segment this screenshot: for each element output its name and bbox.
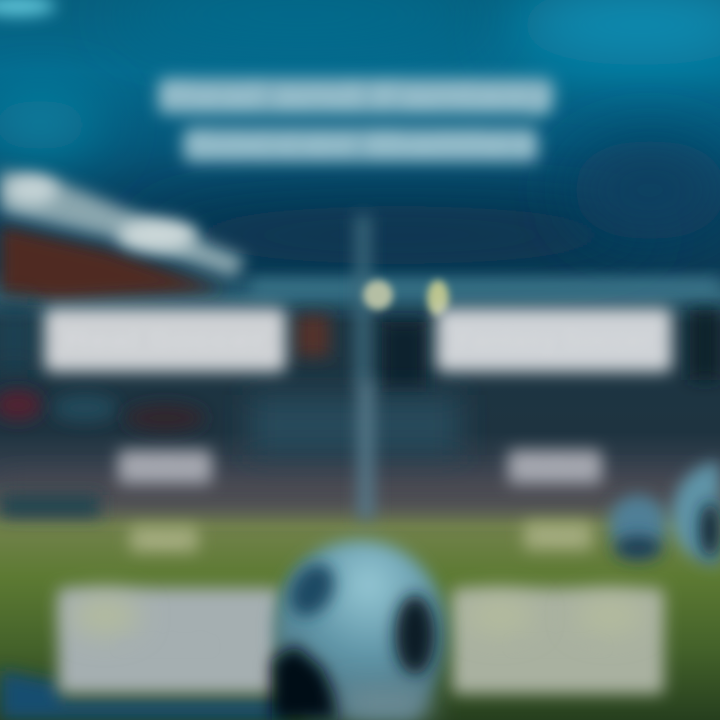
label: left sub-heading xyxy=(118,450,212,484)
panel: lower left text xyxy=(58,588,280,694)
sky clouds xyxy=(0,0,720,294)
label: left pitch tag: Pitch xyxy=(149,534,179,548)
panel: lower left text: Match details xyxy=(117,637,213,654)
panel: upper right heading: Fantasy Soccer xyxy=(456,327,652,354)
panel: upper left heading: Real Soccer xyxy=(65,327,265,354)
label: right sub-heading: Stadium xyxy=(525,460,585,477)
label: right pitch tag xyxy=(524,522,592,550)
stadium stands and crowd xyxy=(0,310,720,517)
title: Real and Fantasy xyxy=(160,75,556,117)
title: Soccer Battles xyxy=(184,124,540,166)
icon: soccer ball, foreground xyxy=(272,540,446,720)
bottom-left blue shadow xyxy=(0,670,290,720)
title xyxy=(158,75,556,166)
background soccer balls, right xyxy=(609,462,720,565)
panel: upper left heading xyxy=(44,308,286,372)
panel: lower right text: Match details xyxy=(510,637,606,654)
label: right pitch tag: Pitch xyxy=(544,530,574,544)
panel: lower right text xyxy=(452,588,664,694)
stadium roof, left xyxy=(0,170,245,370)
label: left pitch tag xyxy=(130,526,198,552)
floodlights xyxy=(363,280,449,316)
label: right sub-heading xyxy=(508,450,602,484)
goal post / central pole xyxy=(356,215,374,520)
label: left sub-heading: Stadium xyxy=(135,460,195,477)
panel: upper right heading xyxy=(436,308,672,372)
